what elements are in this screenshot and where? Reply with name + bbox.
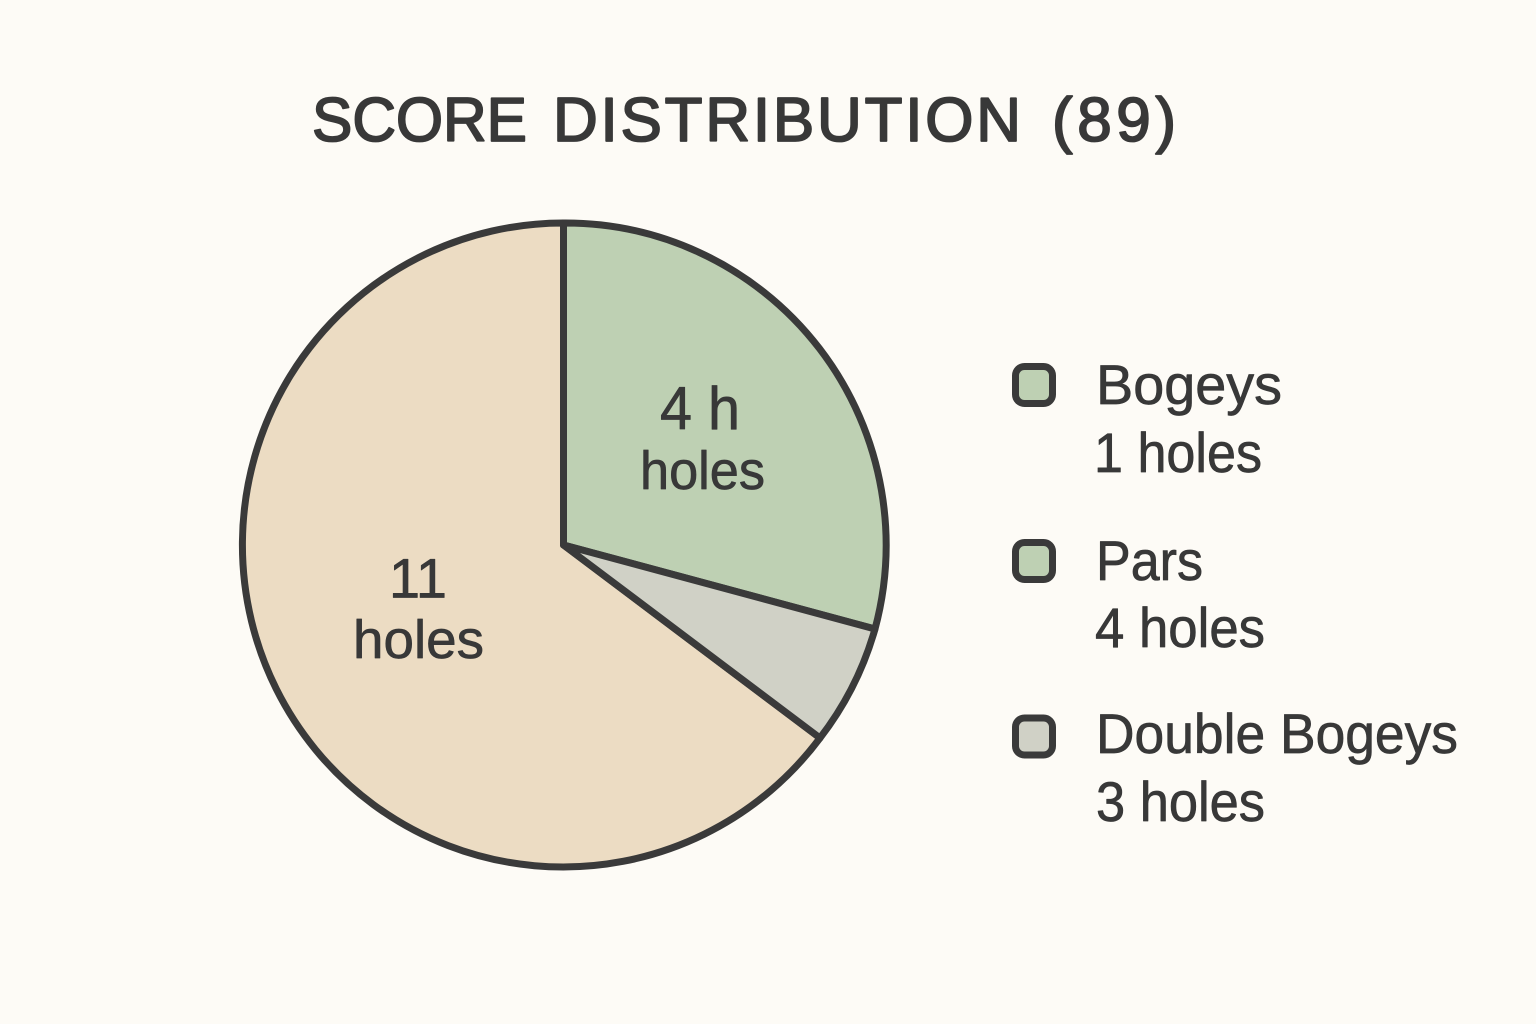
pie label: 4 h holes (640, 375, 765, 501)
legend text: bogeys (1094, 353, 1282, 484)
slice: 11 holes (242, 223, 820, 867)
legend text: bogeys: Bogeys (1096, 353, 1282, 416)
title: SCORE (312, 86, 527, 155)
pie label: 11 holes: 11 (389, 546, 447, 610)
legend (1016, 353, 1458, 833)
legend swatch: double bogeys (1016, 718, 1052, 755)
slice: small grey (564, 545, 875, 738)
pie label: 4 h holes: holes (640, 441, 765, 501)
legend text: double bogeys (1096, 702, 1458, 833)
legend text: pars: 4 holes (1095, 596, 1265, 659)
pie chart (242, 223, 886, 867)
title: (89) (1052, 86, 1176, 155)
legend text: double bogeys: Double Bogeys (1096, 702, 1458, 765)
slice: 4 holes (564, 223, 886, 629)
legend text: pars (1095, 529, 1265, 659)
legend text: double bogeys: 3 holes (1096, 770, 1265, 833)
pie label: 11 holes: holes (353, 610, 484, 670)
legend text: bogeys: 1 holes (1094, 421, 1262, 484)
legend swatch: bogeys (1016, 366, 1052, 404)
title: DISTRIBUTION (553, 86, 1021, 155)
pie label: 4 h holes: 4 h (660, 375, 740, 442)
title (312, 86, 1176, 155)
legend swatch: pars (1016, 542, 1052, 580)
legend text: pars: Pars (1096, 529, 1203, 592)
pie label: 11 holes (353, 546, 484, 670)
